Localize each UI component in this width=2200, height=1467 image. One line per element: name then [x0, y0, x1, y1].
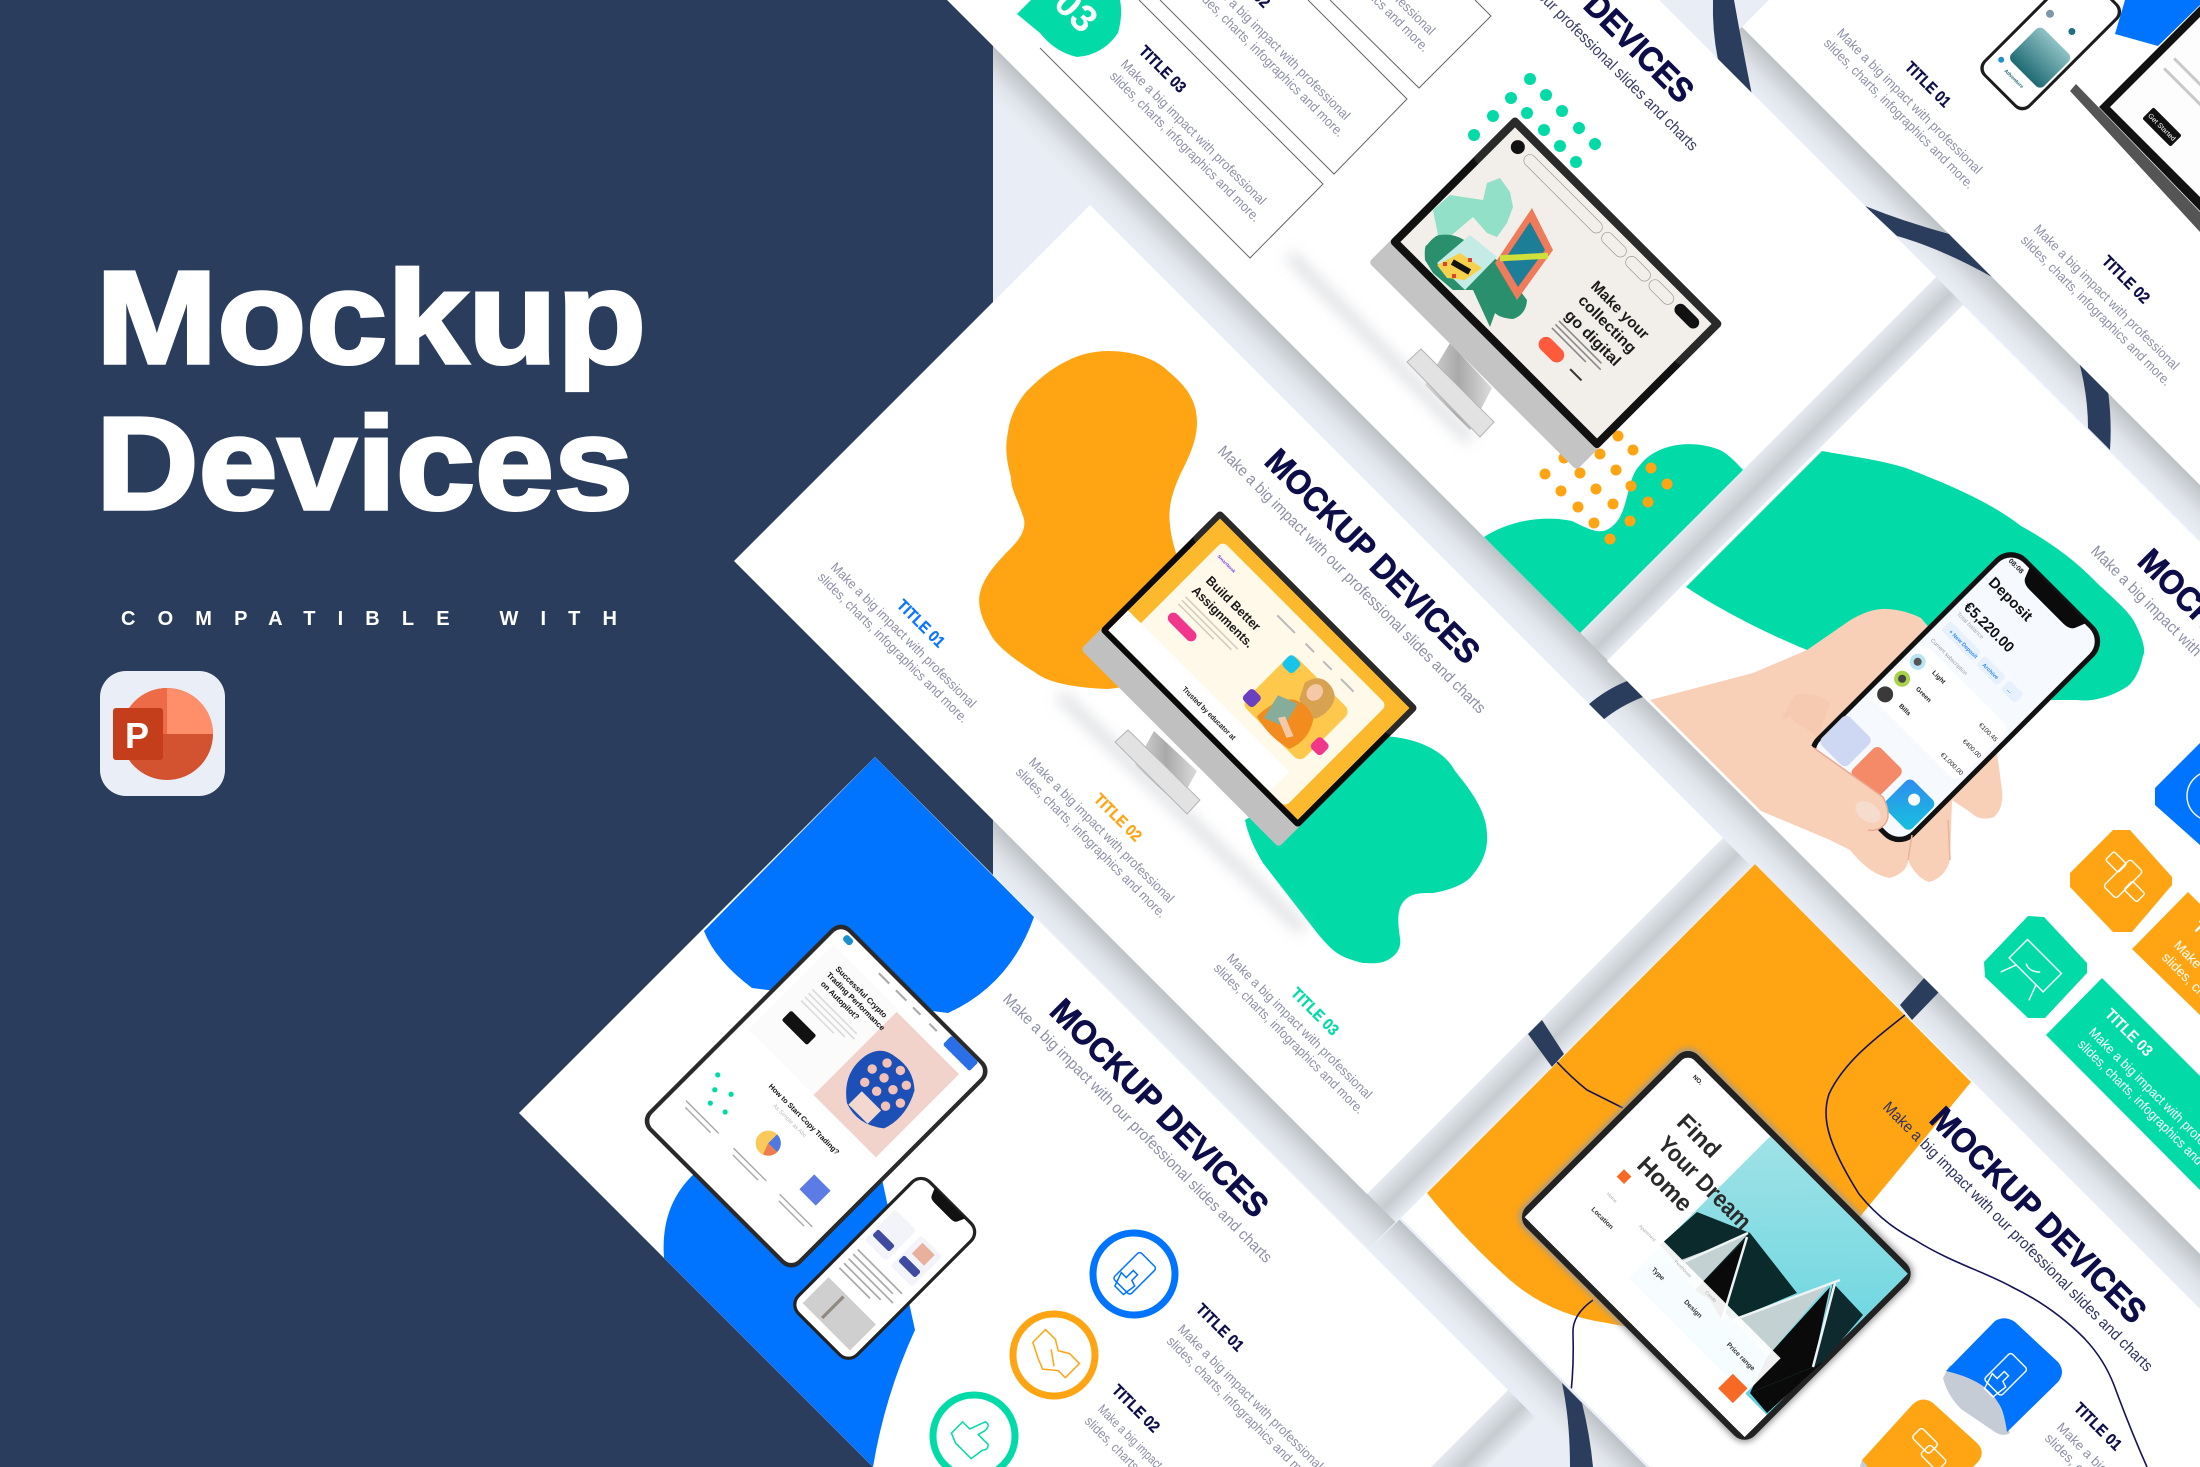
search labels: Design: [1682, 1299, 1703, 1320]
block: title 02: slides, charts, infographics and more.: [1013, 765, 1169, 921]
person: figure: [1255, 664, 1344, 753]
hero copy: [1178, 596, 1238, 657]
tablet mockup: As Simple as Abc: [771, 1103, 807, 1139]
site logo: Smartbook: [1216, 554, 1237, 574]
text: title 01: TITLE 01: [2070, 1400, 2125, 1454]
hero heading: Trading Performance: [825, 970, 887, 1033]
card: blue with gray base: [1943, 1318, 2062, 1435]
block: title 03: Make a big impact with professional: [1224, 951, 1375, 1102]
nav: [878, 972, 938, 1032]
bar: orange title 02: [2132, 892, 2200, 1026]
icon: blue circle: [1093, 1233, 1175, 1315]
monitor stand: [1407, 343, 1494, 437]
black button: [782, 1010, 816, 1045]
icon: network dots: [696, 1071, 744, 1119]
text: body 01: slides, charts, infographics and more.: [1821, 36, 1977, 192]
laptop screen: [2099, 6, 2200, 211]
heading: MOCKUP DEVICES: [1922, 1100, 2154, 1331]
nav pills: [1599, 230, 1676, 307]
orange blob: [979, 351, 1200, 689]
gray photo: [803, 1277, 876, 1350]
action buttons: Archive: [1981, 663, 1999, 681]
laptop button: [2142, 107, 2182, 147]
hero heading: go digital: [1561, 307, 1624, 370]
hero heading: Make your: [1587, 278, 1652, 343]
search button: [1718, 1374, 1748, 1403]
icon: PowerPoint: [100, 671, 225, 796]
block: title 01: Make a big impact with professional: [828, 560, 979, 711]
icon: blue book: [799, 1174, 831, 1206]
hero heading: [1563, 280, 1648, 366]
badge 03: [1017, 0, 1121, 57]
section heading: How to Start Copy Trading?: [767, 1082, 842, 1157]
laptop button: Get Started: [2146, 113, 2176, 143]
hero text: Build Better: [1203, 573, 1264, 634]
black pill: [1674, 304, 1700, 328]
subtitle: Make a big impact with our professional slides and charts: [999, 991, 1275, 1267]
phone mockup: [787, 1171, 982, 1366]
text: body 03: Make a big impact with professional: [1118, 57, 1269, 208]
thin curved line right: [1826, 1015, 2147, 1467]
tablet body and sky: [1513, 1042, 1920, 1449]
bar: green title 03: [2046, 978, 2200, 1193]
green dots: [1468, 73, 1601, 168]
blue button: [943, 1036, 978, 1071]
heading: MOCKUP DEVICES: [1257, 442, 1487, 672]
slide: top right with phone and laptop: [1742, 0, 2200, 485]
tablet mockup: [639, 919, 993, 1273]
slide: bottom left with tablet and phone: [500, 740, 1520, 1467]
slide: top centre with monitor: [900, 0, 2000, 700]
hero text: [1630, 1109, 1777, 1256]
text: body 03: slides, charts, infographics and more.: [1107, 69, 1263, 225]
white search panel: [1547, 1160, 1781, 1394]
finger separations: [1908, 820, 1950, 860]
notch: [2018, 566, 2087, 635]
outlined text boxes: [1040, 0, 1491, 258]
monitor: [1081, 510, 1418, 847]
list rows: €100.45: [1977, 722, 1999, 744]
yellow screen: [1108, 518, 1410, 820]
photo: buildings: [1660, 1212, 1863, 1413]
red button: [1538, 336, 1564, 362]
nav tabs: Condo: [1704, 1290, 1718, 1304]
green blob: [1686, 451, 2144, 700]
block: title 02: TITLE 02: [1108, 1382, 1163, 1436]
green blob: [1484, 444, 1748, 640]
block: title 03: slides, charts, infographics and more.: [1211, 961, 1367, 1117]
monitor shadow: [1290, 255, 1470, 440]
cream page: [1121, 541, 1387, 807]
main title: Mockup: [96, 244, 646, 391]
list rows: [1870, 642, 2010, 782]
cards: [1818, 713, 1873, 769]
heading: title 03: TITLE 03: [1135, 43, 1189, 97]
notch: [927, 1188, 965, 1226]
hero art: card: [1437, 235, 1497, 290]
hero text: Your Dream: [1652, 1131, 1757, 1235]
action buttons: + New Deposit: [1947, 629, 1978, 660]
icon: pie chart: [750, 1125, 786, 1161]
navy ring segments in the gaps: [1528, 0, 2111, 1467]
small icons: [1281, 654, 1302, 675]
nav tabs: [1606, 1191, 1718, 1304]
block: title 01: TITLE 01: [1192, 1301, 1247, 1355]
nav tabs: Apartment: [1638, 1224, 1657, 1243]
hero copy: [800, 989, 859, 1047]
phone mockup: [1976, 0, 2126, 115]
search labels: Location: [1590, 1206, 1614, 1231]
slide drop shadows: [993, 26, 2200, 1467]
hero heading: collecting: [1574, 292, 1639, 357]
hero text: Home: [1632, 1151, 1698, 1218]
block: title 02: [1082, 1382, 1166, 1467]
hero art: pixel character: [1437, 253, 1482, 280]
cards: [864, 1209, 916, 1261]
heading: title 01: TITLE 01: [1901, 59, 1954, 111]
pink button: [1166, 610, 1199, 644]
search labels: [1590, 1206, 1756, 1373]
list heading: Current subscription: [1929, 638, 1968, 677]
hand: [1650, 609, 2002, 882]
page panel: [748, 944, 899, 1095]
tablet page content: [1525, 1060, 1902, 1437]
trusted text: Trusted by educator at: [1180, 685, 1238, 742]
blue corner shape: [2115, 0, 2200, 46]
bar: green title 03: TITLE 03: [2101, 1006, 2156, 1060]
compatible with label: COMPATIBLE WITH: [121, 608, 617, 630]
subtitle: Make a big impact with our professional slides and charts: [1214, 443, 1489, 717]
subtitle: Make a big impact with our professional slides and charts: [1879, 1099, 2156, 1375]
block: title 01: slides, charts, infographics and more.: [815, 570, 971, 726]
slide: right with hand and phone: [1590, 280, 2200, 1330]
main title: [96, 244, 646, 537]
icon: green circle: [933, 1395, 1015, 1467]
orange marker: [1617, 1169, 1631, 1184]
status text: 08:08: [2007, 558, 2024, 576]
text: title 01 body: [1372, 0, 1436, 52]
search bar: [1521, 152, 1605, 236]
navy side panel: [0, 0, 993, 1467]
heading: title 02: TITLE 02: [2098, 253, 2153, 307]
balance: €5,220.00: [1960, 599, 2017, 656]
slide: bottom right with tablet: [1380, 840, 2200, 1467]
action buttons: ...: [2005, 687, 2013, 695]
logo: [842, 934, 854, 946]
block: title 03: TITLE 03: [1287, 985, 1342, 1039]
blue bottom shape: [664, 1170, 915, 1467]
list rows: Green: [1914, 686, 1932, 704]
site name: NO.: [1691, 1074, 1704, 1087]
orange dots: [1540, 430, 1672, 544]
phone mockup: Adventure: [2003, 68, 2025, 90]
logo: [1510, 140, 1525, 154]
captions: [682, 1100, 813, 1231]
person card: [1241, 653, 1351, 762]
list rows: Bills: [1897, 703, 1912, 718]
blue balloon shape: [830, 1040, 929, 1139]
slide: main with monitor and blobs: [700, 180, 1740, 1210]
hero art: mint shape: [1433, 178, 1513, 237]
green blob: [1245, 736, 1487, 963]
monitor stand: [1115, 730, 1200, 814]
hero art: dark green shape: [1425, 235, 1527, 327]
title deposit: Deposit: [1985, 574, 2036, 625]
laptop base: [2070, 84, 2200, 232]
hero text: Assignments.: [1189, 583, 1257, 651]
main title: Devices: [96, 390, 633, 537]
nav tabs: Home: [1606, 1191, 1618, 1204]
orange shape: [1427, 864, 1971, 1350]
phone mockup: [1801, 543, 2109, 851]
thumb: [1740, 715, 1888, 830]
thin curved line left bottom: [1571, 1300, 1593, 1392]
hero text: Find: [1671, 1109, 1726, 1164]
balance caption: Total balance: [1955, 612, 1985, 641]
block: title 02: TITLE 02: [1090, 791, 1145, 845]
icon: PowerPoint: P: [125, 715, 149, 756]
blue top shape: [704, 757, 1034, 1013]
search labels: Price range: [1725, 1342, 1756, 1373]
text: body 01: Make a big impact with professional: [1834, 26, 1985, 177]
view link: [1569, 368, 1582, 381]
list rows: €400.00: [1961, 738, 1983, 760]
nav items: [1277, 615, 1354, 692]
heading: MOCKUP DEVICES: [1042, 992, 1276, 1225]
icon: orange circle: [1013, 1314, 1095, 1396]
pink spheres: [854, 1049, 923, 1119]
block: title 02: Make a big impact with professional: [1026, 755, 1177, 906]
hero art: diamond card: [1495, 208, 1553, 300]
navy buttons: [872, 1229, 895, 1252]
hero heading: [817, 963, 895, 1040]
article lines: [839, 1249, 903, 1313]
card: orange: [1860, 1399, 1982, 1467]
list rows: Light: [1930, 670, 1947, 686]
nav tabs: Penthouse: [1673, 1259, 1693, 1279]
laptop copy: [2163, 57, 2200, 112]
block: title 01: TITLE 01: [893, 597, 948, 651]
hero copy: [1552, 320, 1602, 370]
search labels: Type: [1650, 1266, 1666, 1282]
action buttons: [1941, 621, 2024, 704]
monitor: [1369, 116, 1723, 470]
text: body 02: Make a big impact with professional: [2031, 222, 2182, 373]
card: blue octagon: [2155, 743, 2200, 845]
hero heading: on Autopilot?: [819, 979, 861, 1022]
card: orange octagon: [2070, 830, 2172, 932]
photo pink: [814, 1012, 959, 1157]
card: green octagon: [1984, 916, 2087, 1018]
text: body 02: slides, charts, infographics and more.: [2018, 233, 2174, 389]
monitor shadow: [1060, 695, 1303, 930]
hero heading: Successful Crypto: [834, 965, 889, 1020]
thin curved line left top: [1557, 1062, 1623, 1108]
list rows: €1,000.00: [1939, 752, 1965, 777]
white strip: [1108, 610, 1289, 791]
hand shading: [1782, 694, 1830, 738]
